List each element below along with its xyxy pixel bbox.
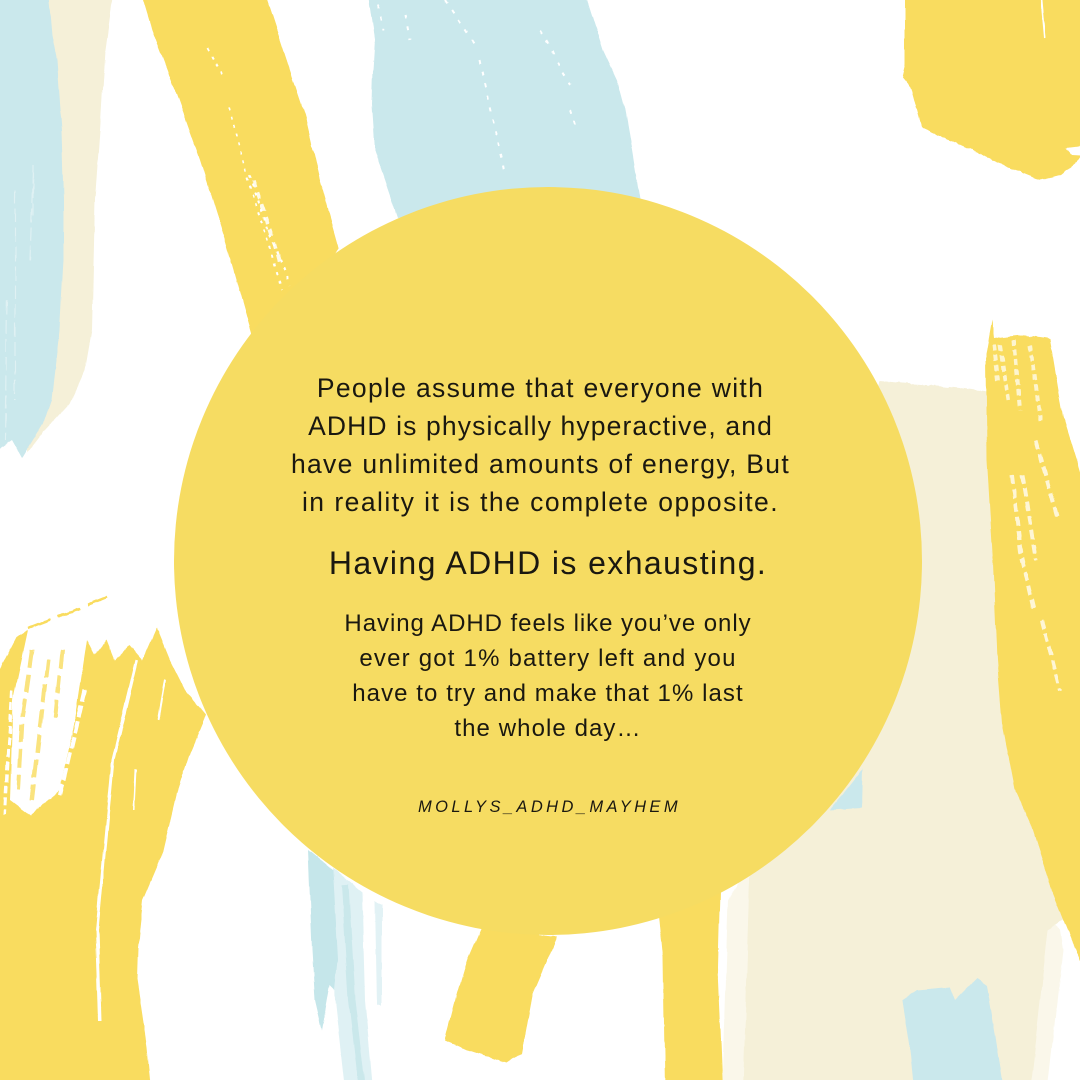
stroke: yellow diagonal top (140, 0, 339, 335)
stroke: blue bottom centre (308, 850, 382, 1080)
credit handle: MOLLYS_ADHD_MAYHEM (418, 798, 681, 816)
stroke: cream lower right (722, 381, 1080, 1080)
body text: intro paragraph: have unlimited amounts of energy, But (291, 449, 790, 479)
stroke: blue small behind circle (830, 768, 863, 810)
stroke: blue bottom right (902, 978, 1004, 1080)
stroke: yellow right (986, 320, 1080, 985)
stroke: yellow bottom vertical (658, 890, 723, 1080)
body text: intro paragraph (291, 373, 790, 517)
stroke: yellow bottom centre (445, 925, 557, 1063)
body text: battery paragraph: ever got 1% battery left and you (359, 645, 737, 672)
body text: battery paragraph: the whole day… (454, 715, 642, 742)
stroke: yellow top right (902, 0, 1080, 180)
stroke: blue top left (0, 0, 64, 458)
body text: battery paragraph: Having ADHD feels like you’ve only (344, 610, 752, 636)
body text: intro paragraph: in reality it is the complete opposite. (302, 487, 779, 517)
heading: having ADHD is exhausting: Having ADHD is exhausting. (329, 545, 767, 581)
stroke: cream top left (20, 0, 113, 452)
stroke: yellow lower left (0, 597, 206, 1080)
body text: battery paragraph: have to try and make that 1% last (352, 680, 744, 707)
body text: intro paragraph: ADHD is physically hyperactive, and (308, 411, 773, 441)
main circle (174, 187, 922, 935)
body text: intro paragraph: People assume that everyone with (317, 373, 764, 403)
body text: battery paragraph (344, 610, 752, 742)
stroke: blue top centre (368, 0, 640, 218)
